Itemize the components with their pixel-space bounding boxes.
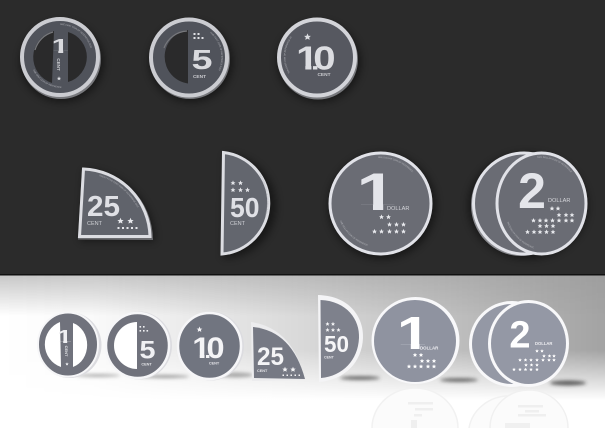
floor shadows <box>76 372 586 386</box>
coin: 2 dollars, light version <box>469 300 569 387</box>
coin: 1 cent, dark version: ONE CENT COIN OF REFERENCE <box>33 70 62 88</box>
coin: 50 cent half shape, dark version: 50 <box>230 192 260 223</box>
coin: 5 cent, dark version <box>148 18 234 102</box>
coin: 25 cent quarter shape, light version: CENT <box>257 369 268 373</box>
coin: 10 cent, dark version: CENT <box>317 72 331 78</box>
coin: 2 dollars, dark version <box>468 152 588 260</box>
coin: 1 cent, light version: 1 <box>58 327 72 347</box>
coin: 50 cent half shape, light version <box>318 295 363 382</box>
coin: 10 cent, light version <box>178 312 244 380</box>
coin: 2 dollars, light version: DOLLAR <box>535 341 552 346</box>
coin: 10 cent, dark version: TEN CENT COIN OF REFERENCE 2010 <box>284 36 292 74</box>
coin: 50 cent half shape, dark version <box>220 150 276 258</box>
star dots <box>194 33 204 39</box>
coin: 50 cent half shape, light version: 50 <box>324 331 349 357</box>
coin: 2 dollars, light version: 2 <box>509 314 531 356</box>
coin: 50 cent half shape, dark version: CENT <box>230 221 246 227</box>
coin: 2 dollars, dark version: TWO DOLLAR COIN OF REFERENCE <box>537 156 572 172</box>
coin: 5 cent, dark version: CENT <box>193 74 206 80</box>
star dots <box>140 326 148 332</box>
coin: 1 cent, light version: CENT <box>64 346 69 357</box>
coin: 25 cent quarter shape, dark version: 25 <box>87 191 120 223</box>
coin: 5 cent, light version: CENT <box>141 362 152 366</box>
coin: 1 cent, dark version: 1 <box>52 34 69 58</box>
coin: 25 cent quarter shape, dark version: TWENTY-FIVE CENT COIN OF REFERENCE 2010 <box>100 174 138 208</box>
coin: 50 cent half shape, light version: CENT <box>324 356 335 360</box>
coin: 10 cent, light version: 10 <box>192 331 225 365</box>
stars <box>525 206 574 234</box>
coin: 1 dollar, dark version: ONE DOLLAR COIN OF REFERENCE <box>378 156 414 172</box>
stars <box>231 180 250 192</box>
coin: 50 cent half shape, dark version: FIFTY CENT COIN OF REFERENCE 2010 <box>259 174 269 216</box>
coin: 25 cent quarter shape, dark version <box>78 168 155 242</box>
stars <box>512 349 556 371</box>
coin: 25 cent quarter shape, dark version: CENT <box>87 221 103 227</box>
coin: 25 cent quarter shape, light version <box>251 322 305 381</box>
coin: 5 cent, dark version: 5 <box>192 45 213 76</box>
stars <box>407 353 436 368</box>
coin: 2 dollars, dark version: 2 <box>518 163 546 219</box>
coin: 2 dollars, dark version: TWO DOLLAR COIN OF REFERENCE <box>507 222 534 248</box>
coin: 1 dollar, dark version: ONE DOLLAR COIN OF REFERENCE <box>340 220 368 246</box>
stars <box>117 218 138 229</box>
coin: 1 dollar, light version: 1 <box>397 308 430 359</box>
floor reflections of dollar coins <box>372 388 568 428</box>
coin: 10 cent, dark version <box>276 18 362 102</box>
coin: 1 cent, dark version: CENT <box>56 58 61 71</box>
coin: 2 dollars, dark version: DOLLAR <box>548 198 570 204</box>
coin: 1 cent, dark version <box>20 17 104 102</box>
stars <box>372 214 406 234</box>
coin: 10 cent, light version: CENT <box>209 362 220 366</box>
coin: 10 cent, dark version: 10 <box>296 40 336 77</box>
stars <box>282 367 300 376</box>
coin: 5 cent, light version <box>106 312 172 380</box>
coin: 1 cent, light version <box>38 312 102 378</box>
background: light studio floor <box>0 274 605 428</box>
coin: 1 dollar, dark version: DOLLAR <box>387 206 409 212</box>
stars <box>325 322 341 332</box>
coin: 1 dollar, dark version <box>328 152 436 260</box>
coin: 25 cent quarter shape, light version: 25 <box>257 343 284 371</box>
coin: 1 dollar, dark version: 1 <box>356 163 396 222</box>
coin: 1 dollar, light version: DOLLAR <box>420 346 439 350</box>
background: dark studio panel <box>0 0 605 274</box>
coin: 1 cent, dark version: ONE CENT COIN OF REFERENCE 2010 <box>60 24 92 48</box>
coin: 1 dollar, light version <box>372 297 460 384</box>
coin: 5 cent, dark version: FIVE CENT COIN OF REFERENCE 2010 <box>210 32 223 71</box>
coin: 5 cent, light version: 5 <box>140 336 156 364</box>
